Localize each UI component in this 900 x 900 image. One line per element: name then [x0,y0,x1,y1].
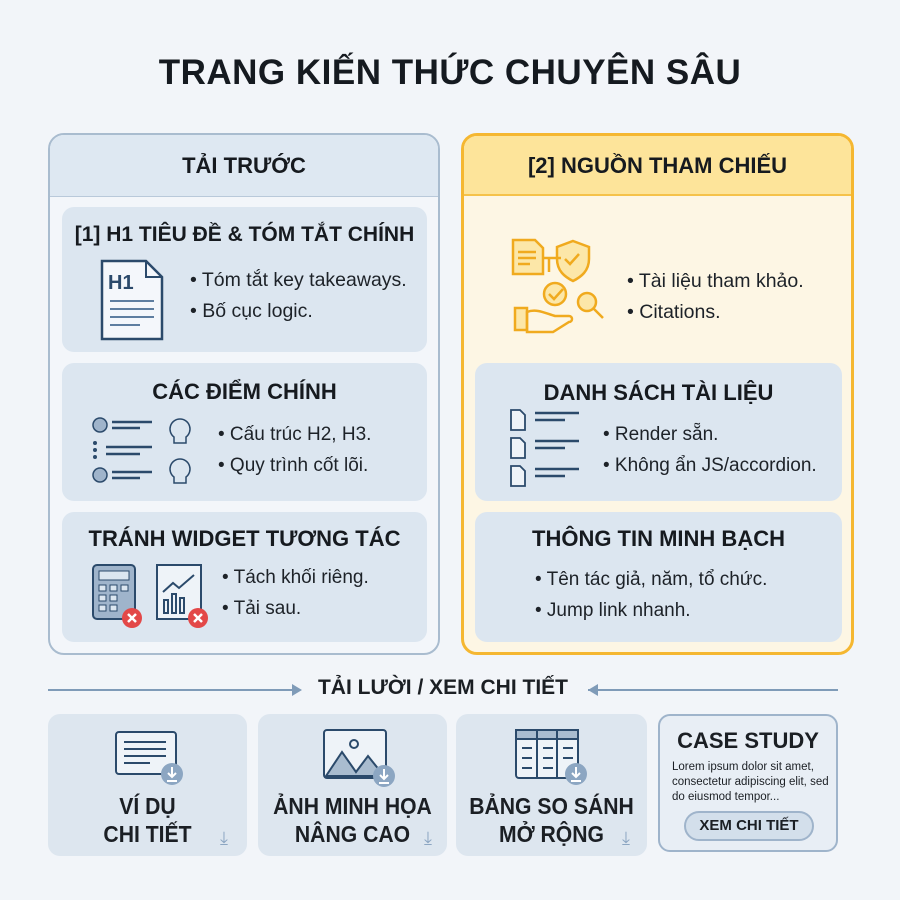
bullets: • Jump link nhanh. [535,600,691,621]
bullets [535,569,767,621]
card: các điểm chính [62,363,427,501]
bullets [218,424,371,476]
panel: nguồn tham chiếu [461,133,854,655]
arrow divider: tải lười: TẢI LƯỜI / XEM CHI TIẾT [318,676,568,699]
card: ví dụ chi tiết: CHI TIẾT [103,821,192,847]
icon: references [512,238,604,334]
bullets: • Tải sau. [222,598,301,619]
panel header: TẢI TRƯỚC [182,153,306,178]
card: case study [658,714,838,852]
card: case study: Lorem ipsum dolor sit amet, consectetur adipiscing elit, sed do eiusmod tempor... [672,761,829,803]
title: TRANG KIẾN THỨC CHUYÊN SÂU [159,53,741,92]
panel header [464,136,851,196]
bullets [603,422,817,476]
button: XEM CHI TIẾT [699,817,799,834]
bullets: • Quy trình cốt lõi. [218,455,368,476]
card: ảnh minh họa [258,714,447,856]
panel header [50,135,438,197]
card: danh sách tài liệu: DANH SÁCH TÀI LIỆU [544,380,773,405]
card: bảng so sánh: MỞ RỘNG [499,821,604,847]
icon: H1 doc [100,260,164,340]
card: các điểm chính: CÁC ĐIỂM CHÍNH [152,379,337,404]
bullets: • Tóm tắt key takeaways. [190,269,407,291]
card: H1: [1] H1 TIÊU ĐỀ & TÓM TẮT CHÍNH [75,223,414,246]
icon: doc list [510,409,579,487]
bullets: • Render sẵn. [603,424,718,445]
bullets: • Citations. [627,301,721,323]
card: thông tin minh bạch [475,512,842,642]
bullets [222,567,369,619]
bullets: • Không ẩn JS/accordion. [603,455,817,476]
bullets: • Tách khối riêng. [222,567,369,588]
card: ảnh minh họa: NÂNG CAO [295,821,410,847]
icon: list bulbs [92,417,191,484]
card: ảnh minh họa: ⤓ [424,828,432,848]
icon: H1 doc: H1 [108,272,134,294]
card: danh sách tài liệu [475,363,842,501]
card: ví dụ chi tiết [48,714,247,856]
card: H1 [62,207,427,352]
bullets: • Tài liệu tham khảo. [627,270,804,292]
icon: calculator + chart [92,564,208,628]
card: bảng so sánh: ⤓ [622,828,630,848]
card: ảnh minh họa: ẢNH MINH HỌA [273,793,432,819]
card: bảng so sánh [456,714,647,856]
bullets: • Tên tác giả, năm, tổ chức. [535,569,767,590]
arrow divider: tải lười [48,674,838,699]
card: case study: CASE STUDY [677,728,819,753]
card: tránh widget: TRÁNH WIDGET TƯƠNG TÁC [88,526,400,551]
button [684,811,814,841]
card: bảng so sánh: BẢNG SO SÁNH [469,793,634,819]
panel: tải trước [48,133,440,655]
card: thông tin minh bạch: THÔNG TIN MINH BẠCH [532,526,785,551]
bullets: • Cấu trúc H2, H3. [218,424,371,445]
card: ví dụ chi tiết: VÍ DỤ [119,793,176,819]
card: tránh widget [62,512,427,642]
bullets: • Bố cục logic. [190,300,313,322]
bullets [627,270,804,323]
card: ví dụ chi tiết: ⤓ [220,828,228,848]
bullets [190,269,407,322]
panel header: [2] NGUỒN THAM CHIẾU [528,153,787,178]
